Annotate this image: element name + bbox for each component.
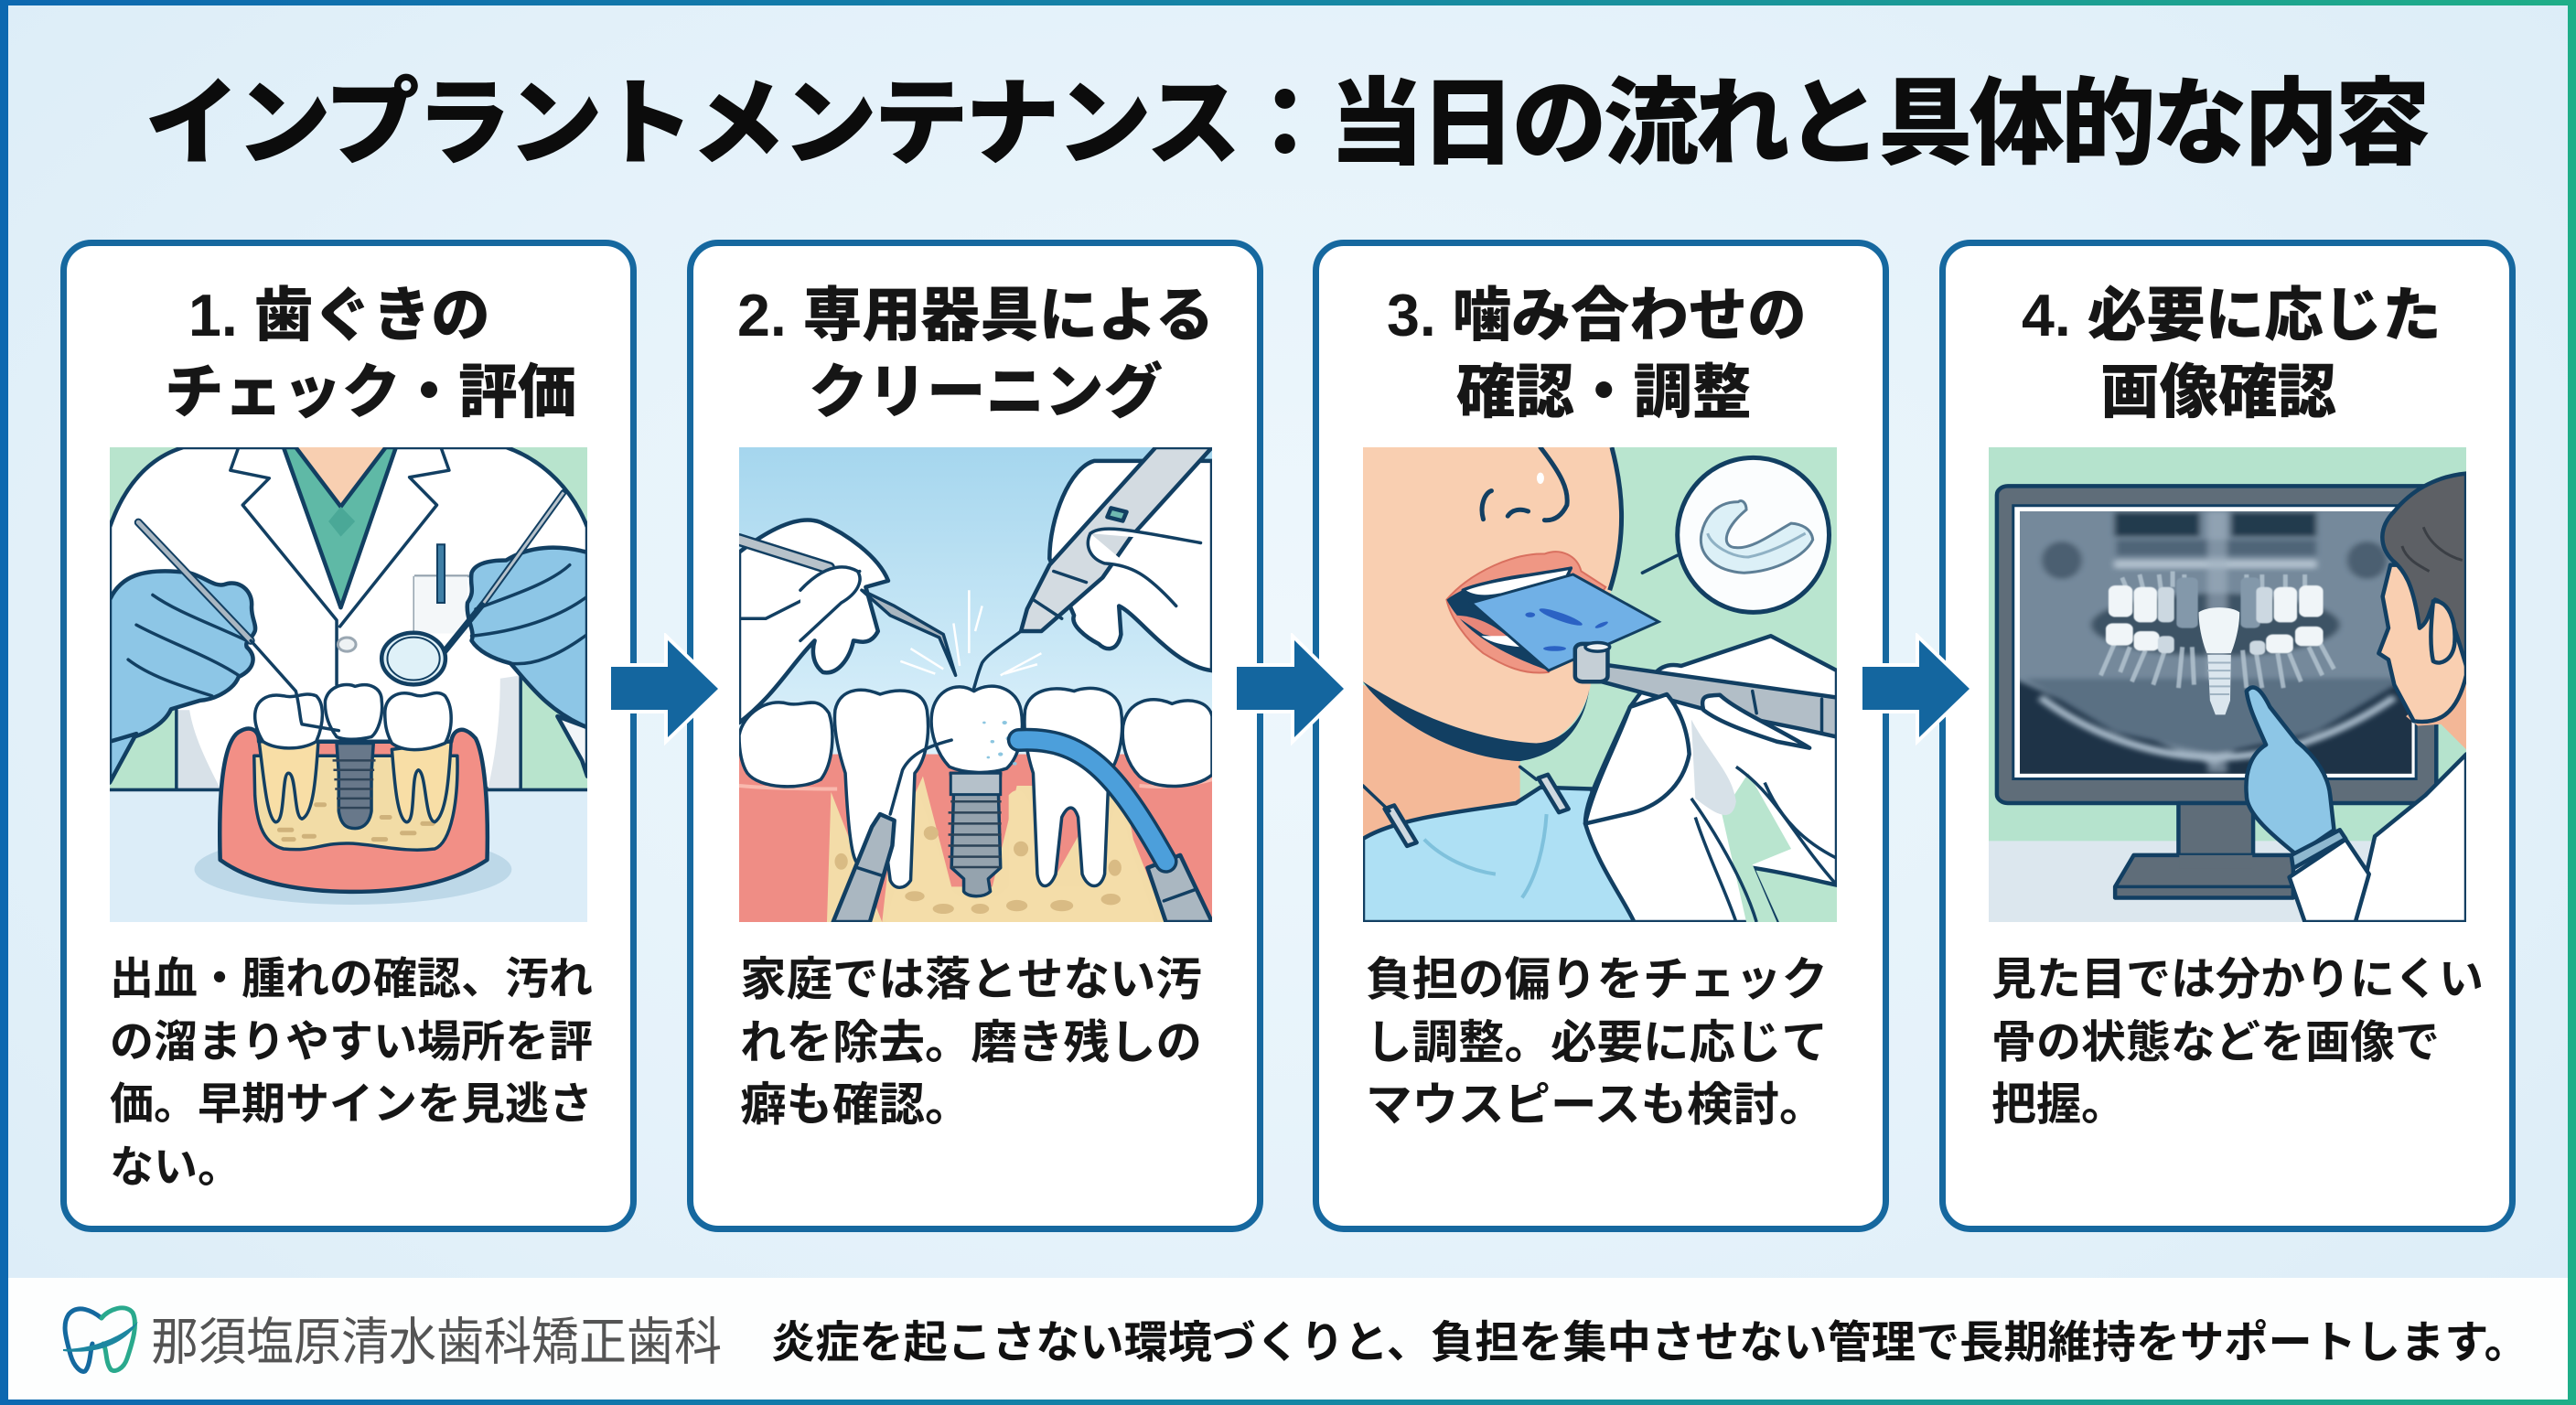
text: step 1 description: ない。 xyxy=(110,1143,242,1191)
text: step 1 description: 価。早期サインを見逃さ xyxy=(110,1080,593,1129)
heading: step 2 xyxy=(737,283,1214,425)
text: step 4 description: 把握。 xyxy=(1991,1080,2126,1130)
lower instruments xyxy=(890,740,951,814)
text: step 2 description: 癖も確認。 xyxy=(740,1078,971,1131)
illustration: bite check with articulating paper xyxy=(1363,447,1837,922)
right hand xyxy=(974,447,1212,688)
heading: step 4: 画像確認 xyxy=(2100,359,2336,425)
illustration: gum check with dental tools xyxy=(110,447,587,922)
panel: step 4 card xyxy=(1939,240,2516,1232)
panel: step 1 card xyxy=(60,240,637,1232)
heading: step 1: チェック・評価 xyxy=(165,359,576,425)
text: step 1 description: の溜まりやすい場所を評 xyxy=(110,1017,593,1067)
arrow 2 xyxy=(1237,633,1344,746)
heading: step 2: 2. 専用器具による xyxy=(737,283,1214,349)
left hand xyxy=(739,520,956,723)
heading: step 3: 3. 噛み合わせの xyxy=(1387,283,1807,349)
slogan: 炎症を起こさない環境づくりと、負担を集中させない管理で長期維持をサポートします。 xyxy=(771,1318,2528,1367)
illustration: professional cleaning of implant xyxy=(739,447,1212,922)
heading: step 2: クリーニング xyxy=(809,359,1163,425)
teeth xyxy=(739,688,1212,887)
arrow 1 xyxy=(611,633,718,745)
heading: step 3 xyxy=(1387,283,1807,425)
heading: step 4 xyxy=(2022,283,2442,425)
icon: clinic tooth logo xyxy=(62,1305,138,1374)
text: step 3 description: マウスピースも検討。 xyxy=(1366,1078,1825,1131)
heading: step 3: 確認・調整 xyxy=(1456,359,1752,425)
title: インプラントメンテナンス：当日の流れと具体的な内容 xyxy=(145,71,2427,177)
text: step 2 description: 家庭では落とせない汚 xyxy=(740,953,1202,1005)
text: step 4 description: 骨の状態などを画像で xyxy=(1991,1017,2440,1067)
footer band xyxy=(8,1278,2568,1400)
arrow 3 xyxy=(1862,633,1970,745)
text: step 3 description xyxy=(1366,953,1828,1131)
text: step 4 description xyxy=(1991,955,2484,1130)
heading: step 1: 1. 歯ぐきの xyxy=(188,283,490,349)
text: step 2 description: れを除去。磨き残しの xyxy=(740,1015,1202,1068)
clinic name: 那須塩原清水歯科矯正歯科 xyxy=(151,1314,722,1371)
illustration: x-ray image review on monitor xyxy=(1989,447,2466,922)
text: step 3 description: し調整。必要に応じて xyxy=(1366,1015,1828,1068)
heading: step 1 xyxy=(165,283,576,425)
implant xyxy=(931,686,1022,896)
heading: step 4: 4. 必要に応じた xyxy=(2022,283,2442,349)
panel: step 2 card xyxy=(687,240,1263,1232)
text: step 1 description xyxy=(110,955,593,1191)
text: step 3 description: 負担の偏りをチェック xyxy=(1366,953,1828,1005)
panel: step 3 card xyxy=(1313,240,1889,1232)
text: step 2 description xyxy=(740,953,1202,1131)
text: step 4 description: 見た目では分かりにくい xyxy=(1991,955,2484,1004)
text: step 1 description: 出血・腫れの確認、汚れ xyxy=(110,955,593,1003)
